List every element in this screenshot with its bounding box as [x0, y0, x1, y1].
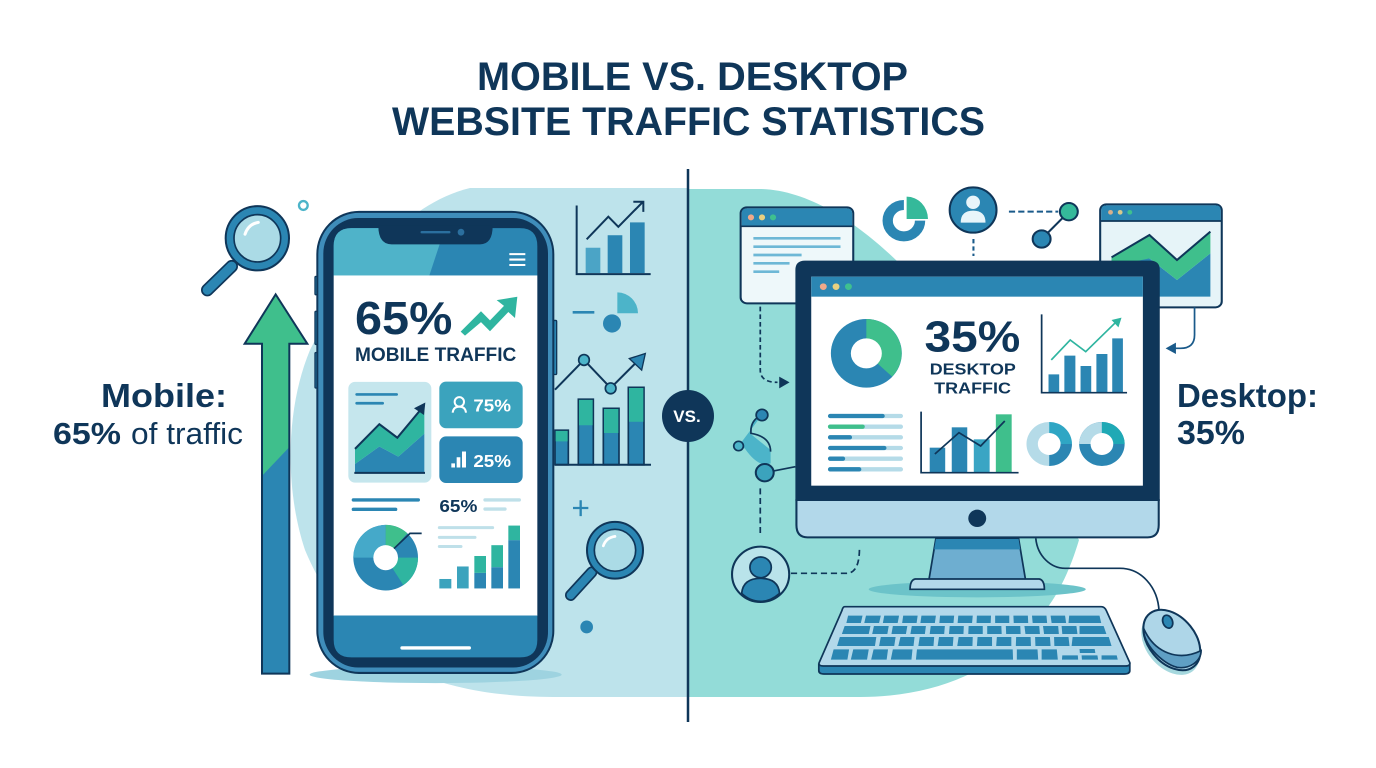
network nodes	[1009, 203, 1078, 248]
arrow: growth	[245, 294, 307, 674]
label: desktop	[1177, 377, 1318, 451]
card: area chart	[348, 382, 431, 483]
title	[392, 55, 985, 144]
network hand icon	[734, 409, 795, 481]
panel: mobile background blob	[291, 188, 688, 697]
stat: 35% desktop traffic: 35%	[925, 313, 1020, 362]
arrow: return	[1166, 307, 1195, 354]
user circle bottom	[732, 547, 789, 602]
title: MOBILE VS. DESKTOP	[477, 55, 908, 99]
chart: main donut	[831, 319, 902, 388]
monitor base	[910, 579, 1044, 589]
stat: 65% mobile traffic: 65%	[355, 292, 452, 344]
title: WEBSITE TRAFFIC STATISTICS	[392, 100, 985, 144]
vs badge	[662, 390, 714, 442]
chart: phone bars	[439, 526, 520, 588]
decor: dot	[580, 621, 593, 633]
vs badge: VS.	[673, 407, 701, 426]
icon: pie ring	[888, 197, 928, 236]
chart: small donuts	[1026, 422, 1125, 466]
phone header	[334, 228, 537, 275]
decor: small ring	[299, 201, 308, 210]
browser window left	[741, 207, 853, 303]
phone screen	[334, 275, 537, 616]
dashed connector user	[791, 548, 859, 573]
phone shadow	[310, 666, 562, 683]
chart: bars with trend	[1042, 314, 1127, 393]
card: 75%: 75%	[473, 395, 512, 415]
label: mobile: of traffic	[131, 416, 243, 451]
dashed connector lower	[758, 488, 763, 536]
phone footer	[334, 615, 537, 657]
stat: 35% desktop traffic	[925, 313, 1020, 397]
card: 25%: 25%	[473, 451, 512, 471]
label: mobile: Mobile:	[101, 377, 227, 414]
list bars	[830, 416, 901, 469]
card: 75%	[439, 382, 523, 428]
keys	[831, 616, 1118, 660]
keyboard	[819, 607, 1130, 674]
card: 25%	[439, 436, 523, 483]
chart: top right bars	[577, 202, 651, 274]
stat: 65% mobile traffic: MOBILE TRAFFIC	[355, 345, 517, 366]
stat: 65% mobile traffic	[355, 292, 517, 366]
label: mobile	[53, 377, 243, 451]
arrow: dashed top left	[760, 307, 790, 388]
stat: 65% small: 65%	[439, 496, 478, 516]
phone side buttons	[315, 276, 557, 388]
label: desktop: Desktop:	[1177, 377, 1318, 414]
chart: line and bars	[555, 354, 651, 465]
chart: combo bars	[921, 412, 1019, 473]
icon: green trend arrow	[461, 297, 517, 336]
monitor base shadow	[869, 581, 1086, 597]
monitor cable	[1036, 538, 1159, 612]
mouse	[1129, 599, 1212, 686]
icon: magnifier bottom right	[571, 522, 643, 595]
panel: desktop background blob	[688, 189, 1079, 697]
chart: phone donut	[353, 525, 422, 590]
monitor screen	[811, 277, 1143, 486]
divider line	[687, 169, 689, 722]
browser window right	[1100, 204, 1222, 307]
decor: plus	[573, 500, 588, 516]
monitor	[795, 261, 1160, 537]
label: mobile: 65%	[53, 416, 121, 451]
icon: user circle	[950, 187, 997, 233]
dashed connector	[970, 239, 976, 256]
stat: 35% desktop traffic: TRAFFIC	[934, 380, 1011, 397]
decor: minus and quarter pie	[573, 292, 638, 333]
text lines	[353, 500, 418, 509]
label: desktop: 35%	[1177, 414, 1245, 451]
monitor stand	[929, 538, 1025, 579]
stat: 35% desktop traffic: DESKTOP	[930, 361, 1016, 378]
phone	[315, 212, 557, 673]
icon: magnifier top left	[207, 206, 289, 290]
